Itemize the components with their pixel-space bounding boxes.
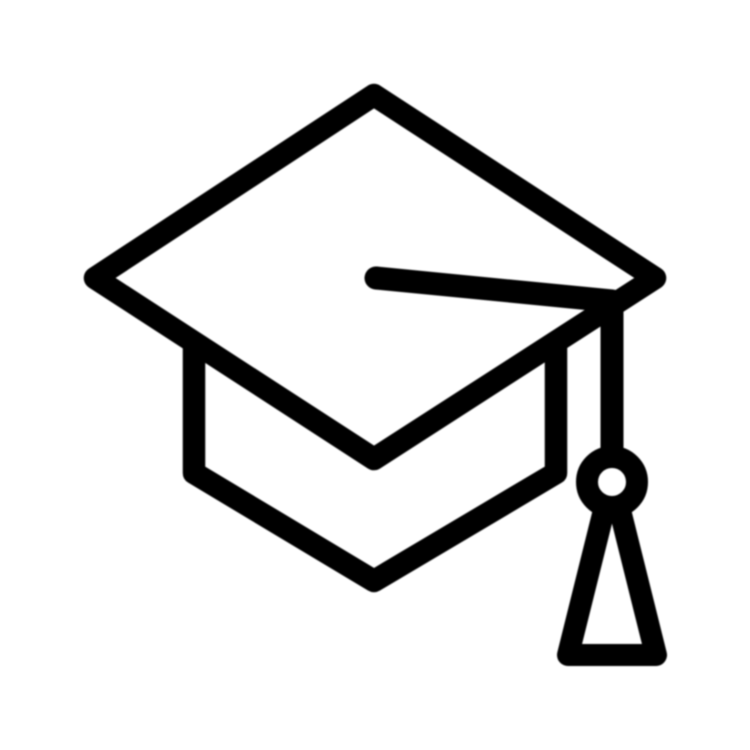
tassel knot <box>587 457 637 507</box>
cap base <box>194 346 556 581</box>
tassel cord <box>376 278 612 460</box>
mortarboard top <box>95 95 655 459</box>
tassel end <box>568 478 656 655</box>
